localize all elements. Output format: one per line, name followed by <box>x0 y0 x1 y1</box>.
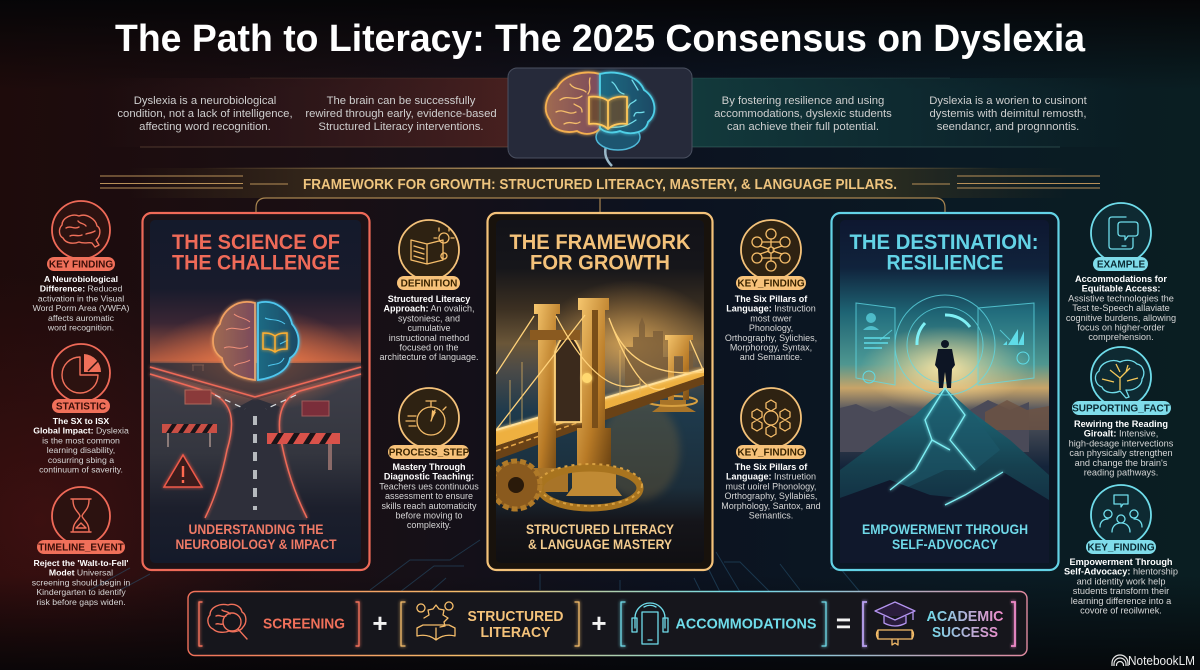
text: Structured Literacy <box>388 294 470 304</box>
text: Self-Advocacy: hlentorship <box>1064 567 1178 577</box>
logo: NotebookLM: NotebookLM <box>1128 654 1195 668</box>
heading: THE DESTINATION: <box>850 231 1038 254</box>
equation term: screening <box>199 602 359 646</box>
equation term: accommodations: ACCOMMODATIONS <box>676 616 816 632</box>
text: systoniesc, and <box>398 313 460 323</box>
caption: SELF-ADVOCACY <box>892 537 998 552</box>
text: brain rewired: Structured Literacy interventions. <box>318 121 484 133</box>
text: systems: dystemis with deimitul remosth, <box>930 108 1086 120</box>
title: The Path to Literacy: The 2025 Consensus on Dyslexia <box>115 18 1086 60</box>
text: resilience: By fostering resilience and using <box>722 95 884 107</box>
equation term: structured literacy: LITERACY <box>480 624 550 641</box>
text: brain rewired: The brain can be successfully <box>327 95 476 107</box>
text: The Six Pillars of <box>735 294 808 304</box>
text: Approach: An ovalich, <box>383 304 475 314</box>
icon: brain with pathways <box>1095 360 1144 398</box>
equation term: academic success <box>863 602 1015 646</box>
label pill: DEFINITION <box>401 278 457 290</box>
text: and change the brain's <box>1075 458 1168 468</box>
operator: plus: + <box>372 608 388 638</box>
label pill: STATISTIC <box>56 402 106 412</box>
callout: key finding six pillars two <box>721 388 821 520</box>
icon: stopwatch <box>406 401 446 435</box>
text: resilience: can achieve their full potential. <box>727 121 879 133</box>
text: Global Impact: Dyslexia <box>33 426 129 436</box>
text: Reject the 'Walt-to-Fell' <box>33 558 129 568</box>
caption: & LANGUAGE MASTERY <box>528 537 672 552</box>
text: learning difference into a <box>1071 596 1172 606</box>
circuit lines decoration <box>90 540 860 592</box>
caption: UNDERSTANDING THE <box>188 522 324 537</box>
text: must uoirel Phonology, <box>726 481 816 491</box>
text: Equitable Access: <box>1082 284 1160 294</box>
text: Kindergarten to identify <box>36 587 126 597</box>
text: continuum of saverity. <box>39 464 123 474</box>
panel: the science of the challenge <box>142 213 370 570</box>
icon: book and gears <box>411 228 454 264</box>
icon: hexagon network <box>752 400 790 437</box>
text: neurobiological condition: condition, not a lack of intelligence, <box>117 108 293 120</box>
text: Mastery Through <box>392 462 466 472</box>
text: covore of reoilwnek. <box>1080 606 1162 616</box>
heading: RESILIENCE <box>886 252 1004 274</box>
panel: intro band right <box>690 78 1130 147</box>
illustration: golden bridge <box>492 280 720 509</box>
text: and Semantice. <box>740 352 802 362</box>
banner: framework for growth: FRAMEWORK FOR GROWTH: STRUCTURED LITERACY, MASTERY, & LANGUAGE PILLARS. <box>303 176 897 193</box>
icon: brain <box>59 215 100 247</box>
text: cognitive burdens, allowing <box>1066 313 1176 323</box>
equation term: structured literacy: STRUCTURED <box>468 608 564 625</box>
label pill: EXAMPLE <box>1097 260 1145 270</box>
text: Empowerment Through <box>1069 557 1173 567</box>
text: Orthography, Syllabies, <box>725 491 817 501</box>
icon: group with speech bubble <box>1100 495 1142 532</box>
panel: the destination resilience <box>832 213 1058 570</box>
caption: EMPOWERMENT THROUGH <box>862 522 1028 537</box>
text: assessment to ensure <box>385 491 473 501</box>
equation term: accommodations <box>621 602 826 646</box>
label pill: KEY_FINDING <box>1087 542 1155 554</box>
label pill: KEY FINDING <box>49 260 113 270</box>
text: is the most common <box>42 435 120 445</box>
text: Language: Instruetion <box>726 472 816 482</box>
text: most ɑwer <box>750 313 792 323</box>
equation term: academic success: SUCCESS <box>932 624 998 641</box>
text: A Neurobiological <box>44 274 118 284</box>
text: systems: Dyslexia is a worien to cusinont <box>929 95 1088 107</box>
heading: FOR GROWTH <box>530 252 670 274</box>
text: and identity work help <box>1077 576 1165 586</box>
text: affects auromatic <box>48 313 115 323</box>
text: Word Porm Area (VWFA) <box>33 303 130 313</box>
heading: THE CHALLENGE <box>172 252 340 274</box>
icon: molecule <box>752 229 790 271</box>
text: neurobiological condition: Dyslexia is a neurobiological <box>134 95 276 107</box>
panel: the framework for growth <box>488 213 720 570</box>
text: risk before gaps widen. <box>36 597 126 607</box>
icon: central brain with book <box>508 68 692 166</box>
text: Difference: Reduced <box>40 284 122 294</box>
callout: process step mastery <box>379 388 479 530</box>
callout: definition structured literacy <box>379 220 479 362</box>
text: Phonology, <box>749 323 793 333</box>
operator: plus: + <box>591 608 607 638</box>
text: word recognition. <box>47 322 114 332</box>
callout: key finding neurobiological difference <box>33 201 130 332</box>
illustration: road and brain <box>150 302 361 520</box>
text: learning disability, <box>47 445 115 455</box>
text: before moving to <box>395 510 463 520</box>
text: complexity. <box>407 520 451 530</box>
text: Accommodations for <box>1075 274 1167 284</box>
icon: tablet with chat bubble <box>1109 217 1138 249</box>
panel: success equation <box>188 592 1027 656</box>
illustration: person on mountain <box>840 294 1049 507</box>
banner: framework for growth <box>100 168 1100 198</box>
equation term: structured literacy <box>401 602 579 646</box>
text: cumulative <box>407 323 451 333</box>
icon: hourglass <box>71 499 91 532</box>
icon: pie chart <box>62 354 101 393</box>
label pill: TIMELINE_EVENT <box>38 542 124 554</box>
text: focused on the <box>399 342 459 352</box>
text: screening should begin in <box>32 577 130 587</box>
text: The SX to ISX <box>53 416 109 426</box>
text: focus on higher-order <box>1077 322 1165 332</box>
text: Language: Instruction <box>726 304 816 314</box>
text: architecture of language. <box>379 352 479 362</box>
callout: supporting fact rewiring <box>1069 347 1174 478</box>
label pill: KEY_FINDING <box>737 448 805 458</box>
heading: THE FRAMEWORK <box>510 231 690 254</box>
caption: NEUROBIOLOGY & IMPACT <box>176 537 337 552</box>
text: skills reach automaticity <box>381 501 477 511</box>
text: Assistive technologies the <box>1068 293 1174 303</box>
text: Semantics. <box>749 510 793 520</box>
heading: THE SCIENCE OF <box>172 231 340 254</box>
text: instructional method <box>389 333 469 343</box>
text: Rewiring the Reading <box>1074 419 1168 429</box>
caption: STRUCTURED LITERACY <box>526 522 674 537</box>
callout: timeline event wait-to-fail <box>32 487 130 607</box>
equation term: academic success: ACADEMIC <box>926 608 1004 625</box>
text: reading pathways. <box>1084 468 1158 478</box>
text: Diagnostic Teaching: <box>384 472 474 482</box>
callout: statistic global impact <box>33 344 129 474</box>
text: The Six Pillars of <box>735 462 808 472</box>
text: systems: seendancr, and prognnontis. <box>937 121 1079 133</box>
text: Giroalt: Intensive, <box>1084 429 1158 439</box>
text: can physically strengthen <box>1069 448 1173 458</box>
text: Morphorogy, Syntax, <box>730 342 812 352</box>
callout: key finding empowerment <box>1064 485 1178 616</box>
text: cosurring sbing a <box>48 455 114 465</box>
panel: intro band left <box>100 78 510 147</box>
text: neurobiological condition: affecting word recognition. <box>139 121 271 133</box>
text: Test te-Speech allaviate <box>1072 303 1170 313</box>
equation term: screening: SCREENING <box>263 616 345 632</box>
text: students transform their <box>1073 586 1169 596</box>
label pill: KEY_FINDING <box>737 278 805 290</box>
text: Morphology, Santox, and <box>721 501 821 511</box>
text: Modet Universal <box>49 568 113 578</box>
text: Orthography, Sylichies, <box>725 333 817 343</box>
callout: example accommodations <box>1066 203 1176 342</box>
label pill: SUPPORTING_FACT <box>1072 404 1170 414</box>
text: brain rewired: rewired through early, evidence-based <box>305 108 497 120</box>
text: Teachers ues continuous <box>379 481 479 491</box>
text: resilience: accommodations, dyslexic students <box>714 108 892 120</box>
connector tree <box>256 198 945 213</box>
text: comprehension. <box>1088 332 1154 342</box>
text: high-desage intervections <box>1069 438 1174 448</box>
callout: key finding six pillars one <box>725 220 817 362</box>
operator: equals: = <box>836 608 851 638</box>
label pill: PROCESS_STEP <box>389 448 470 458</box>
text: activation in the Visual <box>38 293 124 303</box>
